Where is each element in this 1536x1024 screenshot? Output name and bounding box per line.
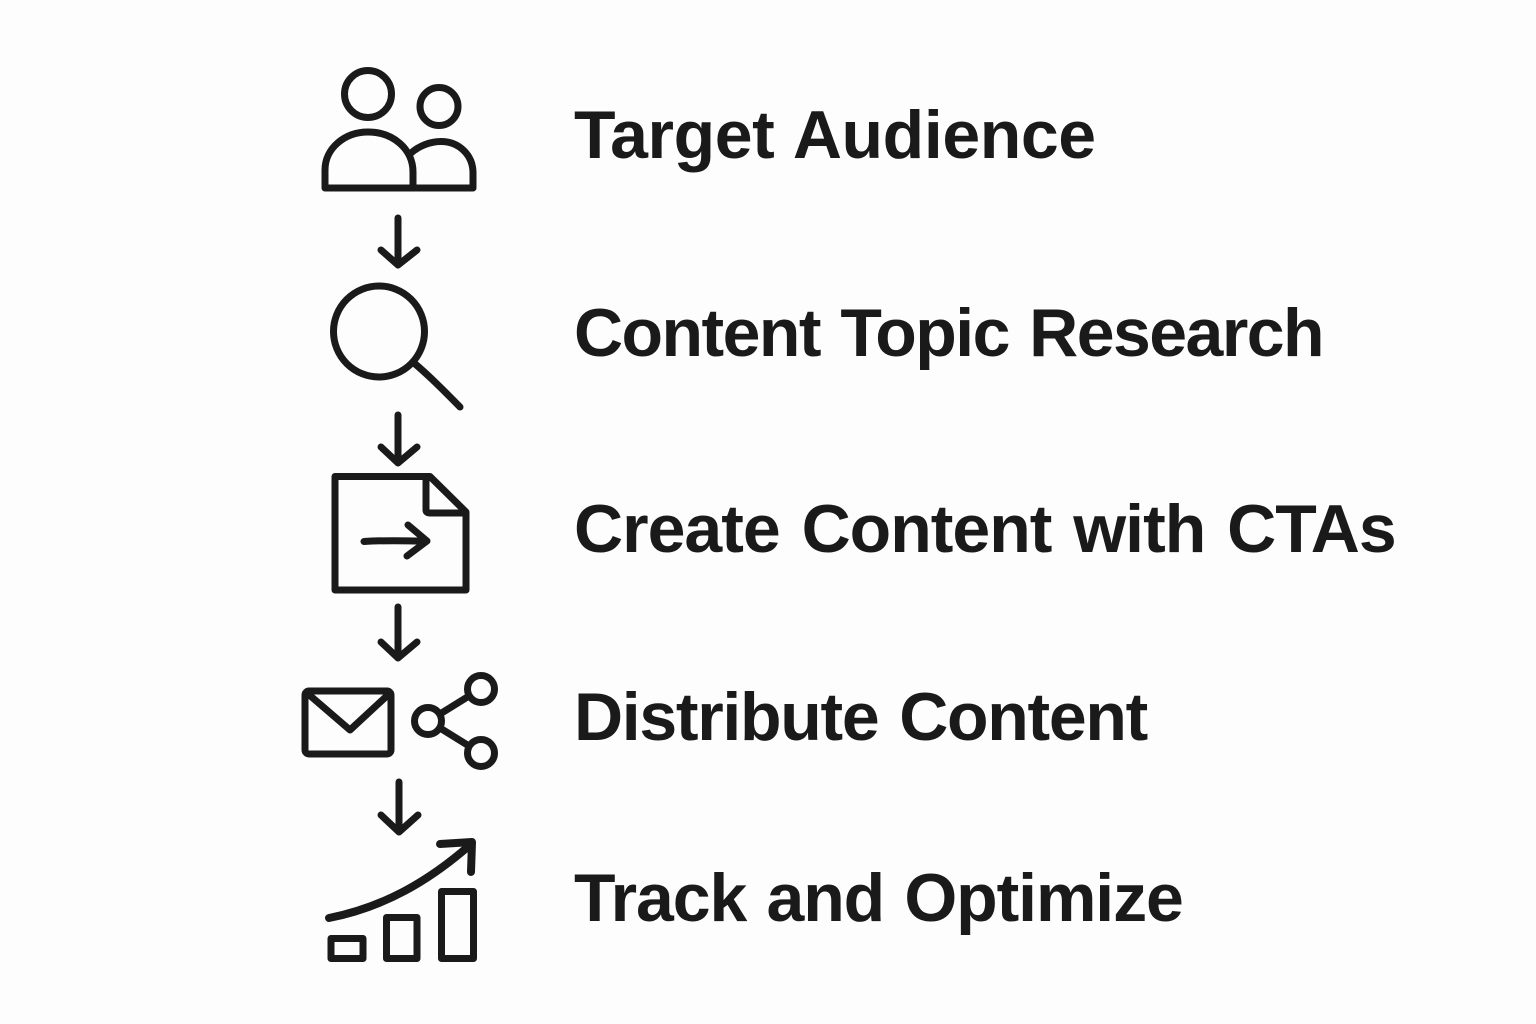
- label: content topic research: Content Topic Research: [574, 295, 1323, 371]
- icon: target audience people: [325, 70, 473, 188]
- arrow: research to create: [381, 415, 417, 463]
- arrow: distribute to track: [381, 782, 418, 832]
- icon: growth chart: [329, 842, 474, 958]
- label: target audience: Target Audience: [574, 97, 1096, 173]
- icon: magnifying glass: [334, 286, 460, 407]
- label: distribute content: Distribute Content: [574, 679, 1147, 755]
- icon: email and share: [305, 676, 494, 766]
- label: track and optimize: Track and Optimize: [574, 860, 1183, 936]
- label: create content with CTAs: Create Content with CTAs: [574, 491, 1396, 567]
- arrow: create to distribute: [381, 607, 417, 658]
- arrow: audience to research: [381, 218, 417, 265]
- icon: document with arrow: [335, 476, 466, 590]
